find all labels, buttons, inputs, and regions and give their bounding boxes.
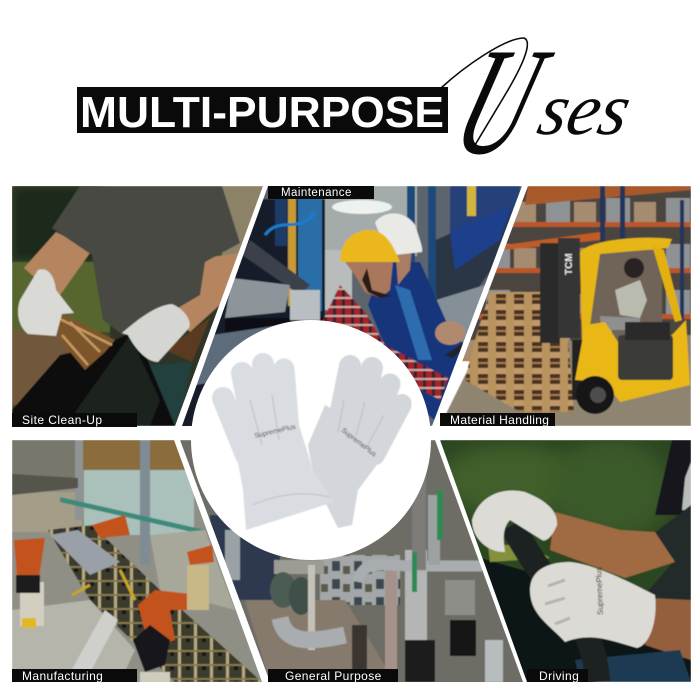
panel: general purpose [180,440,525,685]
gloves [18,269,74,336]
warehouse seen through cab [590,250,662,345]
steering wheel [512,525,598,682]
label: Driving [527,669,588,683]
icon: right glove [308,366,402,528]
shirt [52,186,240,338]
title [77,17,639,186]
label: Manufacturing [12,669,137,683]
face of supervisor [396,252,412,286]
panel: material handling: TCM [564,253,575,275]
label: Site Clean-Up: Site Clean-Up [22,413,103,427]
posts [406,186,416,263]
hands and tablet [435,321,465,345]
jeans [575,650,691,682]
black bag [12,330,175,426]
panel: maintenance [180,186,522,429]
forklift mast [540,243,560,343]
panel: manufacturing [12,440,267,685]
gloves [472,490,557,552]
right machinery [450,186,520,232]
sleeve [648,504,691,600]
worker face and beard [345,262,393,298]
lower arm [645,598,691,660]
label: General Purpose: General Purpose [285,669,382,683]
belt and jeans [165,318,210,362]
driver [624,258,644,278]
arms [24,232,240,332]
icon: left glove [223,364,334,530]
floor ramp [12,600,135,669]
label: Site Clean-Up [12,413,137,427]
script word: Uses: ses [531,69,639,151]
suit [368,262,465,425]
icon: right glove: SupremePlus [340,427,378,459]
car interior [470,555,691,682]
white helmet [375,213,422,255]
wooden pallets [465,292,574,412]
forklift body [580,238,672,340]
label: Material Handling: Material Handling [450,413,549,427]
left machinery [180,199,325,429]
panel: material handling [438,186,691,426]
panel: driving [440,440,691,682]
assembly line [48,525,262,682]
wood bundle [55,310,115,370]
panel: driving: SupremePlus [594,567,605,615]
orange robots [14,515,214,650]
wheel [576,376,614,414]
window pillar [655,440,691,515]
label: Maintenance: Maintenance [281,187,352,199]
pipes and valves [274,560,324,574]
plaid shirt [322,285,448,400]
robot bases [20,582,44,626]
script word: Uses [437,17,639,186]
script word: Uses: U [437,17,568,186]
yellow hard hat [340,230,400,262]
upper arm [550,512,675,578]
label: Maintenance [268,186,374,199]
panel: site clean-up [12,186,264,426]
label: Manufacturing: Manufacturing [22,669,103,683]
icon: left glove: SupremePlus [254,424,297,440]
label: Driving: Driving [539,669,579,683]
center circle with gloves [191,320,431,560]
title bar: MULTI-PURPOSE: MULTI-PURPOSE [80,88,444,137]
